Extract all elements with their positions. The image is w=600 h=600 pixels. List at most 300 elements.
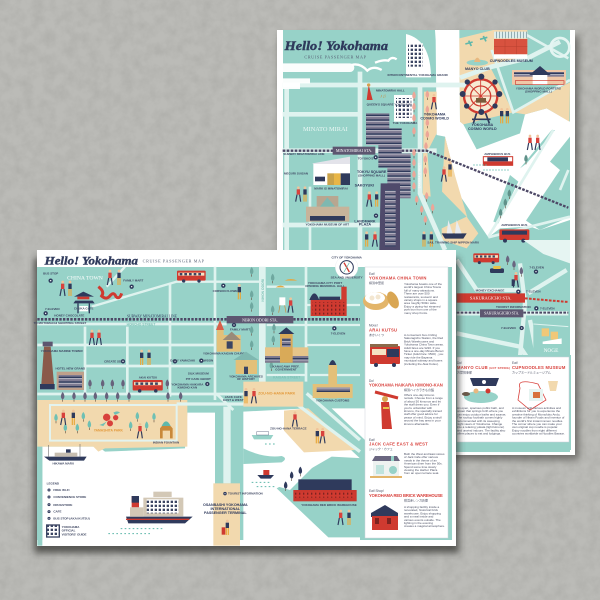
Zou-no-hana terrace: ZOU-NO-HANA TERRACE <box>270 426 307 430</box>
pins and small labels: DAILY YAMAZAKI <box>170 359 195 363</box>
column: Manyo Club: night views of Yokohama. Change <box>457 422 503 426</box>
Archives of History <box>229 352 263 381</box>
visitors guide text: VISITORS' GUIDE <box>62 532 87 536</box>
icon: red retro bus <box>370 344 400 367</box>
horse tram bus <box>473 253 499 264</box>
island trees <box>499 155 528 218</box>
Akai Kutsu bus <box>133 375 163 393</box>
sail hotel building: INTERCONTINENTAL YOKOHAMA GRAND <box>388 73 449 77</box>
column: Manyo Club: offers places to eat and lodgings. <box>457 432 501 436</box>
item: Jack Cafe East and West: of Jack Cafe offer various <box>404 455 438 459</box>
front map sheet: China Town and Yamashita <box>34 250 456 546</box>
item: Yokohama Haikara Kimono-kan: staff offer good advice for <box>404 412 438 416</box>
item: Yokohama Haikara Kimono-kan: rentals. Choose from a range <box>404 396 443 400</box>
park paths <box>50 405 177 441</box>
Noge block: NOGE <box>544 348 558 354</box>
item: Jack Cafe East and West: ジャック・カフェ <box>369 446 393 451</box>
pins and small labels: CORSON FLOWER <box>213 289 240 293</box>
pins and small labels: LAWSON <box>200 359 213 363</box>
item: Akai Kutsu bus: Move! <box>369 324 378 328</box>
panel: Manyo Club and Cupnoodles Museum <box>457 357 569 442</box>
Cosmo World labels: COSMO WORLD <box>468 127 497 131</box>
item: Yokohama China Town: world's largest China Towns <box>404 285 442 289</box>
front map city blocks <box>34 250 367 410</box>
Osanbashi terminal label: PASSENGER TERMINAL <box>204 511 247 515</box>
title <box>44 253 205 267</box>
legend: CONVENIENCE STORE <box>53 495 86 499</box>
back map sheet shadow <box>279 36 579 460</box>
item: Jack Cafe East and West: from an open terrace seat. <box>404 471 439 475</box>
column: Cupnoodles Museum: own original cup noodle is popular. <box>512 425 558 429</box>
title: Hello! Yokohama <box>44 253 138 267</box>
breakwater <box>243 448 285 464</box>
QR code <box>46 524 60 538</box>
pins and small labels: YOKOHAMA HAIKARA <box>171 383 204 387</box>
column: Manyo Club: An open, spacious public bath, and <box>457 406 504 410</box>
item: Yokohama China Town: Enjoy a piping-hot steamed <box>404 304 441 308</box>
column: Cupnoodles Museum: Eat! <box>512 361 518 365</box>
Nihon Odori station sign: NIHON ODORI STA. <box>242 317 278 322</box>
Nihon Odori station sign <box>227 316 293 323</box>
Kaigan Street label: KAIGAN STREET <box>273 376 300 380</box>
item: Akai Kutsu bus: Ticket (Adult fare: ¥500) , you <box>404 352 444 356</box>
item: Yokohama Haikara Kimono-kan: YOKOHAMA HAIKARA KIMONO-KAN <box>369 382 443 388</box>
column: Manyo Club: recommended with its sweeping <box>457 419 500 423</box>
legend <box>47 482 90 520</box>
column: Manyo Club: 万葉倶楽部 <box>457 370 472 374</box>
trees by warehouse <box>284 467 302 491</box>
pins and small labels: TO MOTOMACHI SHOPPING STREET <box>34 321 87 325</box>
item: Akai Kutsu bus: ARAI KUTSU <box>369 328 397 332</box>
World Porters shopping mall: YOKOHAMA WORLD PORTERS <box>516 86 561 90</box>
Yokohama Customs: YOKOHAMA CUSTOMS <box>316 399 349 403</box>
item: Akai Kutsu bus: Adult fares are ¥220. If you <box>404 346 440 350</box>
Yokohama City Port Memorial Hall: OPENING MEMORIAL HALL <box>305 284 345 288</box>
World Porters shopping mall: (SHOPPING MALL) <box>525 90 552 94</box>
small labels in Minato Mirai: (SHOPPING MALL) <box>358 174 385 178</box>
Yokohama Kaigan Church: YOKOHAMA KAIGAN CHURCH <box>203 352 247 356</box>
Akai Kutsu bus: AKAI KUTSU <box>139 375 157 379</box>
column: Cupnoodles Museum: カップヌードルミュージアム <box>512 370 551 374</box>
item: Jack Cafe East and West: American diner from the 50s. <box>404 462 443 466</box>
item: Yokohama Haikara Kimono-kan: the staff dress you. Even if <box>404 403 439 407</box>
icon: steamed buns in bamboo basket <box>363 290 401 310</box>
tan waterfront land with Ferris wheel <box>459 30 527 124</box>
Hotel New Grand: HOTEL NEW GRAND <box>56 367 86 371</box>
Yokohama Kaigan Church <box>203 320 247 356</box>
side panel: things to do <box>363 267 448 538</box>
Cosmo World labels <box>420 113 497 131</box>
pins and small labels: BUS STOP <box>43 272 58 276</box>
labels: 7-ELEVEN <box>526 290 541 294</box>
Indian water fountain: INDIAN FOUNTAIN <box>153 440 179 444</box>
Zou-no-hana Park: ZOU-NO-HANA PARK <box>258 392 296 396</box>
item: Yokohama Red Brick Warehouse: 横浜赤レンガ倉庫 <box>404 498 428 502</box>
people on blocks <box>89 330 151 365</box>
concert hall singer: QUEEN'S SQUARE YOKOHAMA <box>367 102 413 106</box>
subway track <box>37 315 360 323</box>
water and bay area <box>37 393 365 546</box>
Yokohama Museum of Art <box>306 196 349 226</box>
large cruise ship <box>126 492 193 523</box>
clouds <box>283 63 354 89</box>
Minato Mirai area name: MINATO MIRAI <box>303 126 348 133</box>
visitors guide text: YOKOHAMA <box>62 525 80 529</box>
item: Yokohama China Town: restaurants, souvenir and <box>404 295 438 299</box>
passenger terminal <box>213 483 240 546</box>
item: Jack Cafe East and West: Both the West and East stores <box>404 452 445 456</box>
cafe person <box>238 284 241 299</box>
title <box>284 39 389 59</box>
tan peninsula <box>442 137 467 217</box>
item: Yokohama China Town: YOKOHAMA CHINA TOWN <box>369 276 427 280</box>
right bay water <box>243 408 360 546</box>
pins and small labels: SILK MUSEUM <box>188 371 209 375</box>
Hotel New Grand <box>56 367 86 390</box>
pale plaza <box>523 240 570 263</box>
Sakuragicho subway sign: SAKURAGICHO STA. <box>484 312 519 316</box>
Nihon Odori label: NIHON ODORI <box>261 279 265 302</box>
Yamashita park land <box>37 400 187 452</box>
title: CRUISE PASSENGER MAP <box>304 54 367 59</box>
shore road <box>177 393 360 452</box>
Honcho Street label: HONCHO STREET <box>127 322 155 326</box>
item: Akai Kutsu bus: Yokohama China Town areas. <box>404 343 444 347</box>
item: Yokohama Haikara Kimono-kan <box>369 379 443 429</box>
item: Yokohama China Town: Yokohama boasts one of the <box>404 282 442 286</box>
red retro bus <box>177 271 206 283</box>
Red Brick Warehouse: YOKOHAMA RED BRICK WAREHOUSE <box>301 503 357 507</box>
small labels in Minato Mirai: TOYOKO'S <box>358 156 373 160</box>
item: Yokohama China Town: There are over 500 <box>404 292 430 296</box>
icon: red brick warehouse <box>371 505 398 530</box>
pins and small labels: 7-ELEVEN <box>331 332 345 336</box>
Sakuragicho station sign <box>457 293 525 303</box>
item: Yokohama Haikara Kimono-kan: kimono afterwards. <box>404 422 430 426</box>
back map sheet: Minato Mirai <box>277 30 575 455</box>
item: Yokohama China Town: variety shops in a square <box>404 298 438 302</box>
icon: Jack Cafe shopfront <box>370 456 402 478</box>
back map lower right in zoom coordinates <box>456 240 571 450</box>
Kanagawa Prefectural Government Office: GOVERNMENT <box>275 367 297 371</box>
column: Manyo Club: MANYO CLUB (HOT SPRING) <box>457 365 510 370</box>
item: Yokohama Haikara Kimono-kan: Offers one-day kimono <box>404 393 435 397</box>
lower navy track <box>457 310 568 316</box>
item: Jack Cafe East and West: Spend some time slowly <box>404 465 437 469</box>
tan Zou-no-hana terrace land <box>284 408 355 452</box>
front map sheet shadow <box>34 258 459 553</box>
Hikawa Maru ship: HIKAWA MARU <box>53 461 74 465</box>
column: Cupnoodles Museum: creative thinking of Momofuku Ando, <box>512 412 561 416</box>
item: Yokohama Red Brick Warehouse: and a meal inside and <box>404 515 434 519</box>
Sakura Street trees <box>412 90 434 225</box>
small labels in Minato Mirai: SAKOYUKI <box>355 184 374 188</box>
item: Akai Kutsu bus: have a one-day Minato Burari <box>404 349 444 353</box>
China Town label: CHINA TOWN <box>67 275 103 281</box>
compass emblem: CITY OF YOKOHAMA <box>332 256 363 260</box>
China Town gate: CHUKA GATE <box>74 306 93 310</box>
pins and small labels: JACK CAFE <box>225 395 242 399</box>
column: Manyo Club: Do! <box>457 361 462 365</box>
item: Yokohama Red Brick Warehouse: creates a magical atmosphere. <box>404 524 445 528</box>
labels: 7-ELEVEN <box>501 326 516 330</box>
Osanbashi terminal label <box>203 492 263 515</box>
item: Akai Kutsu bus: A convenient bus circling <box>404 333 437 337</box>
tan strip beside Sakura Street <box>423 92 437 197</box>
compass emblem: SEA AND UNIVERSITY <box>331 275 363 279</box>
Sakuragicho subway sign <box>480 309 523 317</box>
labels: 7-ELEVEN <box>529 265 544 269</box>
labels: MONEY EXCHANGE <box>476 289 504 293</box>
column: Manyo Club: onsen that springs forth where you <box>457 409 503 413</box>
item: Akai Kutsu bus: あかいくつ <box>369 332 384 337</box>
sail training ship: SAIL TRAINING SHIP NIPPON MARU <box>427 240 479 244</box>
item: Jack Cafe East and West: meals in the theme of an <box>404 458 437 462</box>
island promenade lower <box>493 175 518 223</box>
Cosmo World labels: YOKOHAMA <box>471 123 494 127</box>
item: Akai Kutsu bus: Sakuragicho Station, the Red <box>404 336 443 340</box>
column: Cupnoodles Museum: founder of Nissin Foods and inventor of <box>512 416 565 420</box>
Osanbashi terminal label: OSANBASHI YOKOHAMA <box>203 503 248 507</box>
person with suitcase <box>512 272 518 287</box>
island promenade upper <box>520 130 555 168</box>
item: Yokohama Red Brick Warehouse: renovated, historical brick <box>404 508 439 512</box>
item: Yokohama Haikara Kimono-kan: peace of mind. Enjoy a stroll <box>404 415 442 419</box>
item: Yokohama China Town: full of many attractions. <box>404 288 435 292</box>
small navy boat <box>252 470 275 487</box>
Ferris wheel Cosmo Clock <box>460 74 502 123</box>
item: Yokohama Red Brick Warehouse: warehouse. Enjoy shopping <box>404 511 441 515</box>
top right water <box>332 408 365 440</box>
Zou-no-hana terrace <box>270 411 325 443</box>
Hikawa Maru ship <box>44 444 87 465</box>
sail hotel building <box>388 34 449 77</box>
amphibious bus on water: AMPHIBIOUS BUS <box>484 152 510 156</box>
people in China Town <box>60 270 121 296</box>
item: Yokohama China Town: 横浜中華街 <box>369 280 384 285</box>
sky duck bus <box>499 223 529 243</box>
icon: woman in kimono with parasol <box>375 392 398 429</box>
labels: TOURIST INFORMATION <box>496 305 531 309</box>
concert hall singer: ♪♫ <box>380 93 386 99</box>
title bar <box>37 250 367 267</box>
icon: Manyo Club hot spring <box>462 378 499 403</box>
column: Cupnoodles Museum: The corner where you can make your <box>512 422 562 426</box>
seagulls <box>352 58 397 71</box>
roads <box>37 267 360 410</box>
Sakura Street label: SAKURA STREET <box>418 163 422 188</box>
item: Jack Cafe East and West: JACK CAFE EAST & WEST <box>369 442 428 446</box>
Minatomirai station sign: MINATOMIRAI STA. <box>336 148 372 153</box>
item: Yokohama Haikara Kimono-kan: kimono, the specially trained <box>404 409 442 413</box>
Yokohama City Port Memorial Hall: YOKOHAMA CITY PORT <box>308 281 342 285</box>
Zou-no-hana Park <box>243 382 303 407</box>
small labels in Minato Mirai: PLAZA <box>359 223 371 227</box>
Cosmo World labels: COSMO WORLD <box>420 116 449 120</box>
item: Jack Cafe East and West: viewing the Harbor Plaza <box>404 468 438 472</box>
China Town gate <box>73 292 95 313</box>
column: Cupnoodles Museum: countries worldwide at Noodles Bazaar. <box>512 432 565 436</box>
taxi <box>490 266 504 273</box>
small ferry <box>252 432 277 444</box>
red dragon <box>98 287 122 298</box>
item: Akai Kutsu bus: Brick Warehouses and <box>404 339 434 343</box>
pins and small labels: FAMILY MART <box>230 328 250 332</box>
column: Manyo Club: and unwind indoors. The facility also <box>457 428 506 432</box>
item: Yokohama China Town: area roughly 500m wide. <box>404 301 437 305</box>
Yokohama Customs <box>313 360 353 403</box>
column: Cupnoodles Museum: A museum with various activities and <box>512 406 561 410</box>
column: Manyo Club: The rooftop footbath comes highly <box>457 416 503 420</box>
back map upper area in zoom coordinates <box>283 30 570 250</box>
right island <box>526 137 570 230</box>
labels: 7-ELEVEN <box>540 306 555 310</box>
roundabout <box>551 38 569 57</box>
concert hall singer <box>367 83 413 106</box>
item: Yokohama China Town: Eat! <box>369 272 375 276</box>
pins and small labels: HONEY CHOCOLATE <box>54 313 84 317</box>
pins and small labels: EAST & WEST <box>223 398 244 402</box>
water <box>435 30 570 237</box>
trees near Sakuragicho <box>506 255 523 277</box>
teal left strip <box>37 447 42 546</box>
land below the panel <box>456 355 571 450</box>
column: Cupnoodles Museum <box>512 361 566 436</box>
visitors guide text: OFFICIAL <box>62 529 76 533</box>
concert hall singer: MINATOMIRAI HALL <box>376 89 405 93</box>
legend: BUS STOP (AKAI KUTSU) <box>53 516 90 520</box>
item: Yokohama Red Brick Warehouse <box>369 489 445 530</box>
Yokohama Marine Tower <box>40 342 84 389</box>
pier road <box>223 407 231 483</box>
subway label: SUBWAY MINATOMIRAI LINE <box>283 152 325 156</box>
column: Manyo Club: into a relaxing yukata (light kimono) <box>457 425 504 429</box>
item: Jack Cafe East and West <box>369 438 445 478</box>
hotel The Yokohama Bay <box>394 95 413 122</box>
item: Jack Cafe East and West: Eat! <box>369 438 375 442</box>
painter with palm trees <box>276 279 297 313</box>
visitors guide text <box>62 525 87 536</box>
traveler with red suitcase <box>222 520 229 535</box>
Yamashita park trees and roses: YAMASHITA PARK <box>94 428 124 432</box>
small labels in Minato Mirai <box>284 121 418 227</box>
subway label: SUBWAY MINATOMIRAI LINE <box>127 314 178 318</box>
sail training ship <box>427 220 479 244</box>
item: Yokohama Haikara Kimono-kan: 横浜ハイカラきもの館 <box>404 387 434 392</box>
Minatomirai station sign <box>333 147 375 155</box>
street trees <box>250 267 276 371</box>
World Porters shopping mall <box>512 66 566 94</box>
Manyo Club <box>465 36 490 71</box>
Archives of History: OF HISTORY <box>237 377 255 381</box>
legend: FREE WI-FI <box>53 488 70 492</box>
item: Yokohama Haikara Kimono-kan: around the bay area in your <box>404 419 441 423</box>
Kanagawa Prefectural Government Office: KANAGAWA PREF. <box>273 365 300 369</box>
item: Akai Kutsu bus: (including the Akai Kutsu). <box>404 362 439 366</box>
legend: DRUGSTORE <box>53 503 72 507</box>
tan land lower right <box>513 82 570 122</box>
icon: noodle cups <box>518 381 558 410</box>
item: Yokohama Haikara Kimono-kan: Do! <box>369 379 374 383</box>
Queen's Square towers <box>366 113 411 198</box>
dark trees along Yamashita <box>61 379 182 402</box>
item: Yokohama Haikara Kimono-kan: of about 50 kimonos and let <box>404 399 441 403</box>
Yokohama City Port Memorial Hall <box>305 281 347 316</box>
pins and small labels: KIMONO KAN <box>178 385 197 389</box>
Manyo Club: MANYO CLUB <box>465 67 490 71</box>
Osanbashi terminal label: TOURIST INFORMATION <box>228 492 263 496</box>
column: Cupnoodles Museum: the world's first instant ramen noodles. <box>512 419 563 423</box>
pins and small labels: FAMILY MART <box>123 278 144 282</box>
column: Cupnoodles Museum: exhibitions for you to experience the <box>512 409 560 413</box>
pins and small labels: PIT CAFE GENOT <box>186 377 211 381</box>
left bay water <box>42 413 215 546</box>
item: Akai Kutsu bus: may ride the Bayama <box>404 355 433 359</box>
Yamashita park trees and roses <box>54 410 156 438</box>
subway line dotted track <box>283 151 568 208</box>
title: CRUISE PASSENGER MAP <box>143 259 205 264</box>
roads <box>457 260 568 357</box>
item: Yokohama Red Brick Warehouse: various events outside. The <box>404 518 441 522</box>
Archives of History: YOKOHAMA ARCHIVES <box>229 374 263 378</box>
people <box>296 94 540 247</box>
small labels in Minato Mirai: MEGURI SUISAN <box>284 171 308 175</box>
item: Yokohama Red Brick Warehouse: YOKOHAMA RED BRICK WAREHOUSE <box>369 493 443 498</box>
Cupnoodles museum building <box>490 32 533 63</box>
couple by warehouse <box>338 510 351 525</box>
labels <box>476 265 555 330</box>
waves <box>108 529 164 534</box>
pins and small labels: 7-ELEVEN <box>45 307 60 311</box>
column: Manyo Club: can enjoy outdoor baths and saunas. <box>457 412 506 416</box>
Kanagawa Prefectural Government Office <box>265 327 308 371</box>
small labels in Minato Mirai: THE YOKOHAMA <box>393 121 418 125</box>
Mark Is Minatomirai building: MARK IS MINATOMIRAI <box>314 186 348 190</box>
pins and small labels <box>34 272 345 402</box>
column: Cupnoodles Museum: CUPNOODLES MUSEUM <box>512 365 566 370</box>
item: Yokohama Red Brick Warehouse: A shopping facility inside a <box>404 505 440 509</box>
small labels in Minato Mirai: TOKYU SQUARE <box>357 170 387 174</box>
Sakuragicho red track <box>525 298 568 302</box>
item: Yokohama Red Brick Warehouse: Eat! Shop! <box>369 489 384 493</box>
Sakuragicho station sign: SAKURAGICHO STA. <box>470 296 511 301</box>
Landmark tower <box>379 183 400 250</box>
sky duck bus: AMPHIBIOUS BUS <box>501 223 527 227</box>
item: Yokohama China Town <box>363 272 442 315</box>
Yokohama Marine Tower: YOKOHAMA MARINE TOWER <box>41 349 84 353</box>
legend: LEGEND <box>47 482 60 486</box>
amphibious bus on water <box>473 152 513 170</box>
Noge block <box>533 324 568 356</box>
Mark Is Minatomirai building <box>313 157 350 190</box>
column: Cupnoodles Museum: Enjoy noodles from eight different <box>512 428 557 432</box>
compass emblem <box>331 256 363 279</box>
item: Yokohama Haikara Kimono-kan: you're unfamiliar with <box>404 406 432 410</box>
white cut around trees <box>278 467 313 490</box>
red brick land <box>277 457 365 537</box>
item: Yokohama China Town: many shop fronts. <box>404 311 428 315</box>
item: Yokohama Red Brick Warehouse: lighting in the evening <box>404 521 433 525</box>
Red Brick Warehouse <box>293 479 357 507</box>
Cupnoodles museum building: CUPNOODLES MUSEUM <box>490 59 533 63</box>
Indian water fountain <box>153 421 179 444</box>
Osanbashi terminal label: INTERNATIONAL <box>211 507 241 511</box>
roads <box>283 35 570 250</box>
tan pier <box>442 217 478 248</box>
Cosmo World labels: YOKOHAMA <box>424 113 446 117</box>
Yokohama Museum of Art: YOKOHAMA MUSEUM OF ART <box>306 222 349 226</box>
pins and small labels: CREATE SD <box>104 359 122 363</box>
